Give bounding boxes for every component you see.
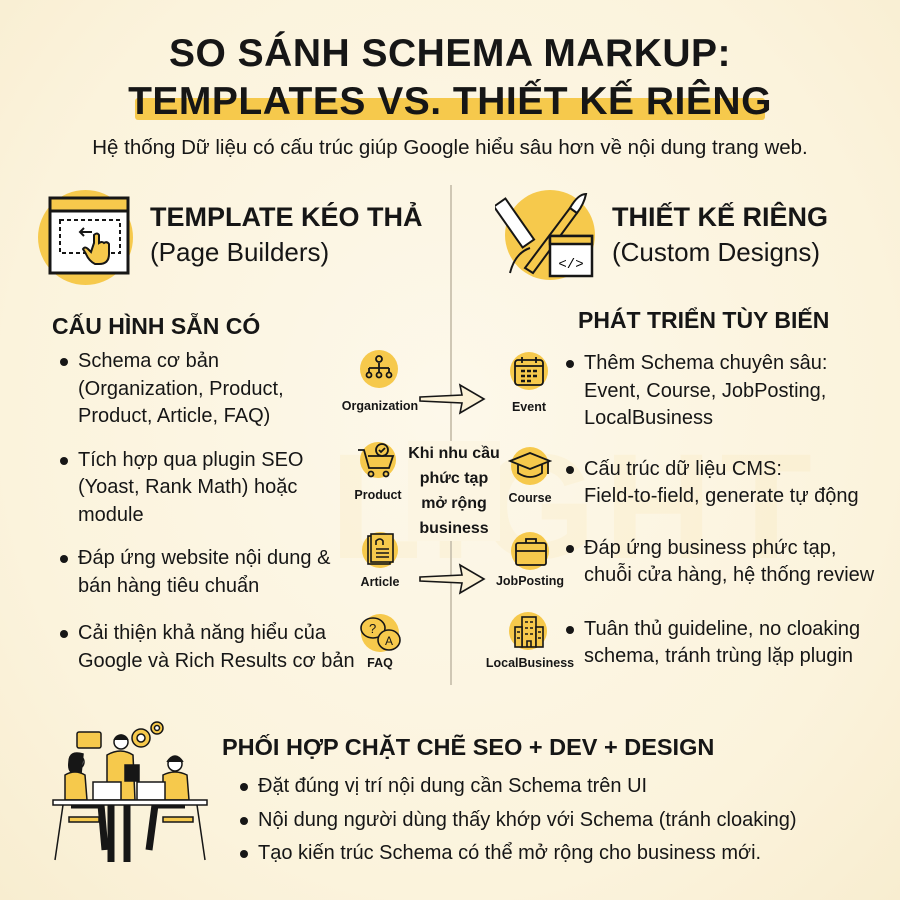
icon: Article (360, 532, 399, 589)
title: SO SÁNH SCHEMA MARKUP: (169, 32, 731, 75)
icon: custom design: </> (558, 257, 584, 273)
left bullets (60, 350, 355, 672)
center text (408, 441, 500, 541)
watermark: LIGHT (330, 422, 820, 590)
heading: right section: PHÁT TRIỂN TÙY BIẾN (578, 307, 829, 333)
icon: drag template (38, 190, 133, 285)
icon: Organization (342, 350, 418, 413)
heading: collaboration: PHỐI HỢP CHẶT CHẼ SEO + DEV + DESIGN (222, 734, 714, 760)
icon: Course (508, 447, 552, 505)
left bullets: (Organization, Product, (78, 378, 284, 400)
bottom bullets: Nội dung người dùng thấy khớp với Schema (tránh cloaking) (258, 808, 797, 830)
heading: template: (Page Builders) (150, 237, 329, 267)
right bullets (566, 352, 874, 667)
icon: LocalBusiness (486, 612, 574, 670)
left bullets: Đáp ứng website nội dung & (78, 547, 330, 569)
arrow: top (419, 383, 486, 415)
center text: Khi nhu cầu (408, 445, 500, 462)
icon: Product (354, 442, 402, 502)
right bullets: Event, Course, JobPosting, (584, 380, 826, 402)
illustration: team (52, 721, 208, 862)
icon: FAQ (360, 614, 401, 670)
heading: custom: THIẾT KẾ RIÊNG (612, 202, 828, 232)
bottom bullets: Tạo kiến trúc Schema có thể mở rộng cho business mới. (258, 842, 761, 864)
right bullets: schema, tránh trùng lặp plugin (584, 645, 853, 667)
icon: FAQ: FAQ (367, 656, 393, 670)
bottom bullets (240, 775, 797, 864)
right bullets: Field-to-field, generate tự động (584, 485, 859, 507)
heading: template: TEMPLATE KÉO THẢ (150, 202, 422, 232)
icon: FAQ: A (385, 634, 393, 648)
right bullets: Thêm Schema chuyên sâu: (584, 352, 827, 374)
left bullets: Product, Article, FAQ) (78, 405, 270, 427)
icon: Event (510, 352, 548, 414)
right bullets: Đáp ứng business phức tạp, (584, 536, 836, 558)
subtitle: Hệ thống Dữ liệu có cấu trúc giúp Google hiểu sâu hơn về nội dung trang web. (92, 136, 808, 159)
icon: Event: Event (512, 400, 546, 414)
left bullets: (Yoast, Rank Math) hoặc (78, 476, 297, 498)
icon: custom design (495, 190, 595, 280)
heading: left section: CẤU HÌNH SẴN CÓ (52, 313, 260, 339)
arrow: bottom (419, 563, 486, 595)
left bullets: Schema cơ bản (78, 350, 219, 372)
icon: Organization: Organization (342, 399, 418, 413)
icon: LocalBusiness: LocalBusiness (486, 656, 574, 670)
right bullets: chuỗi cửa hàng, hệ thống review (584, 564, 874, 586)
icon: JobPosting: JobPosting (496, 574, 564, 588)
heading: custom: (Custom Designs) (612, 237, 820, 267)
center text: phức tạp (420, 470, 488, 487)
right bullets: Cấu trúc dữ liệu CMS: (584, 458, 782, 480)
right bullets: LocalBusiness (584, 407, 713, 429)
left bullets: Tích hợp qua plugin SEO (78, 448, 303, 470)
title (128, 31, 772, 123)
center text: mở rộng (421, 495, 487, 512)
center text: business (419, 520, 489, 537)
title: TEMPLATES VS. THIẾT KẾ RIÊNG (128, 80, 772, 123)
left bullets: module (78, 504, 144, 526)
icon: JobPosting (496, 532, 564, 588)
bottom bullets: Đặt đúng vị trí nội dung cần Schema trên UI (258, 775, 647, 797)
left bullets: bán hàng tiêu chuẩn (78, 574, 259, 596)
icon: FAQ: ? (369, 621, 376, 636)
heading: custom (612, 202, 828, 267)
icon: Article: Article (361, 575, 399, 589)
icon: Product: Product (354, 488, 402, 502)
right bullets: Tuân thủ guideline, no cloaking (584, 618, 860, 640)
left bullets: Cải thiện khả năng hiểu của (78, 622, 326, 644)
left bullets: Google và Rich Results cơ bản (78, 650, 355, 672)
icon: Course: Course (508, 491, 552, 505)
heading: template (150, 202, 422, 267)
